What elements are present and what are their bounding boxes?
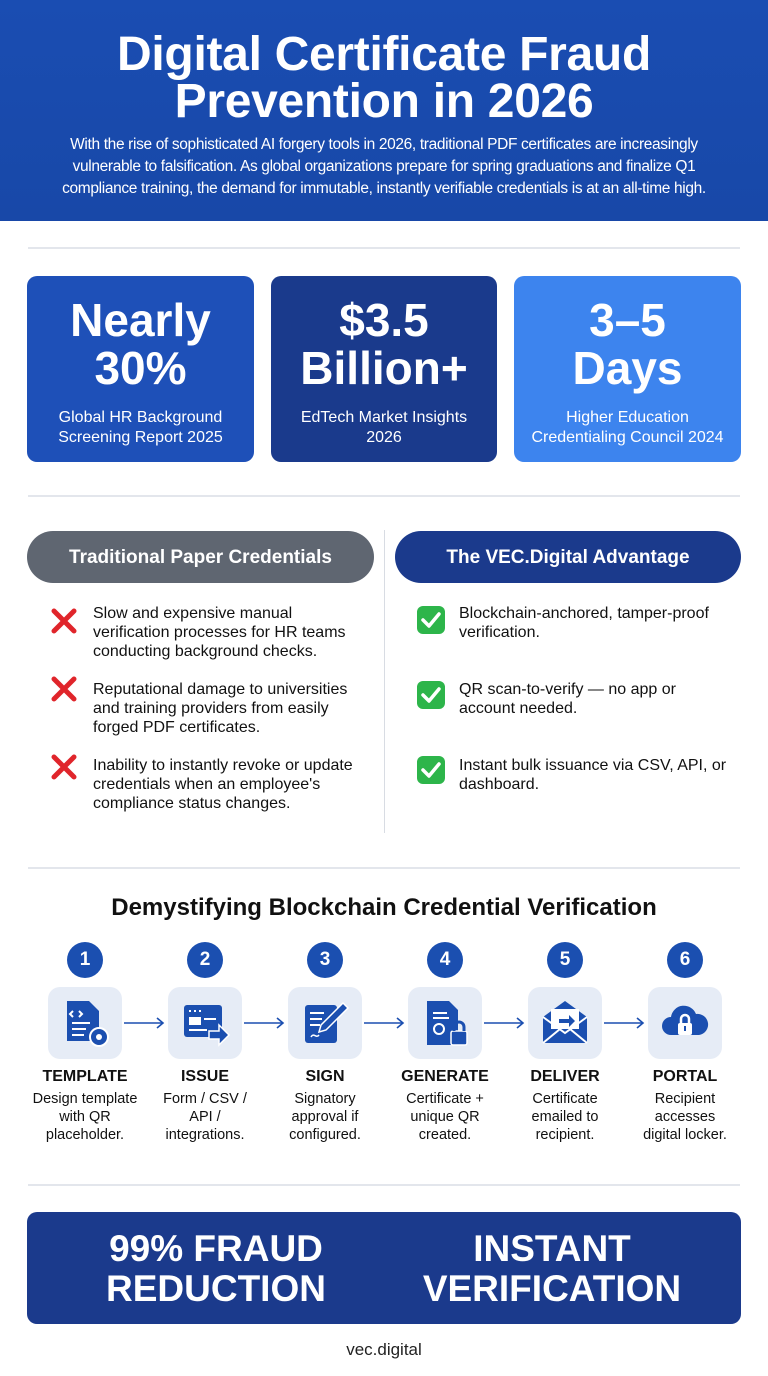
left list: forged PDF certificates. (93, 719, 260, 736)
step 1: TEMPLATE (42, 1068, 128, 1085)
arrow (244, 1017, 284, 1029)
bottom banner (27, 1212, 741, 1324)
step 3: 3 (320, 949, 330, 970)
step 2: API / (189, 1109, 221, 1125)
title (117, 28, 651, 128)
step 4: created. (419, 1127, 471, 1143)
step 4 (401, 942, 489, 1143)
step 5: emailed to (532, 1109, 598, 1125)
step 4: 4 (440, 949, 450, 970)
step 2 (163, 942, 247, 1143)
step 5: DELIVER (530, 1068, 600, 1085)
right list: Blockchain-anchored, tamper-proof (459, 605, 709, 622)
stat card: 30%: Global HR Background (59, 409, 222, 426)
right list (417, 605, 726, 793)
left list (52, 605, 353, 812)
stat card: $3.5B (271, 276, 497, 462)
right list: Instant bulk issuance via CSV, API, or (459, 757, 726, 774)
step 6: PORTAL (653, 1068, 717, 1085)
banner: instant verification (423, 1228, 681, 1309)
left list: conducting background checks. (93, 643, 317, 660)
step 5: Certificate (532, 1091, 598, 1107)
header (0, 0, 768, 221)
step 3: approval if (292, 1109, 358, 1125)
step 1: 1 (80, 949, 90, 970)
step 1: placeholder. (46, 1127, 124, 1143)
footer: vec.digital (346, 1340, 422, 1359)
step 3: configured. (289, 1127, 361, 1143)
subtitle: compliance training, the demand for immutable, instantly verifiable credentials is at an all-time high. (62, 180, 706, 197)
step 6: digital locker. (643, 1127, 727, 1143)
banner: fraud reduction: 99% FRAUD (109, 1228, 323, 1269)
right list: account needed. (459, 700, 577, 717)
subtitle: vulnerable to falsification. As global organizations prepare for spring graduations and finalize Q1 (73, 158, 695, 175)
left list: Slow and expensive manual (93, 605, 292, 622)
stat card: 30%: Nearly (70, 294, 211, 346)
step 2: Form / CSV / (163, 1091, 247, 1107)
stat card: 30%: Screening Report 2025 (58, 429, 223, 446)
step 5: 5 (560, 949, 570, 970)
step 3 (288, 942, 362, 1143)
stat card: 3-5 days (514, 276, 741, 462)
step 4: unique QR (410, 1109, 480, 1125)
check icon (417, 681, 445, 709)
stat card: 3-5 days: Days (573, 342, 682, 394)
stat card: $3.5B: $3.5 (339, 294, 429, 346)
left list: verification processes for HR teams (93, 624, 346, 641)
process heading: Demystifying Blockchain Credential Verification (111, 894, 657, 921)
arrow (604, 1017, 644, 1029)
step 6: 6 (680, 949, 690, 970)
arrow (124, 1017, 164, 1029)
banner: instant verification: INSTANT (473, 1228, 631, 1269)
banner: fraud reduction: REDUCTION (106, 1268, 326, 1309)
step 3: SIGN (305, 1068, 345, 1085)
step 6 (643, 942, 727, 1143)
arrow (484, 1017, 524, 1029)
step 3: Signatory (294, 1091, 356, 1107)
step 2: ISSUE (181, 1068, 229, 1085)
pill: traditional (27, 531, 374, 583)
arrow (364, 1017, 404, 1029)
right list: QR scan-to-verify — no app or (459, 681, 676, 698)
text: compliance status changes. (93, 795, 290, 812)
x icon (52, 608, 76, 634)
step 2: integrations. (166, 1127, 244, 1143)
step 2: 2 (200, 949, 210, 970)
left list: and training providers from easily (93, 700, 329, 717)
pill: VEC advantage (395, 531, 741, 583)
subtitle (62, 136, 706, 197)
left list: credentials when an employee's (93, 776, 320, 793)
check icon (417, 606, 445, 634)
left list: Inability to instantly revoke or update (93, 757, 353, 774)
stat card: 3-5 days: Higher Education (566, 409, 689, 426)
stat card: 3-5 days: 3–5 (589, 294, 666, 346)
step 4: Certificate + (406, 1091, 484, 1107)
step 5: recipient. (536, 1127, 594, 1143)
stat card: $3.5B: 2026 (366, 429, 402, 446)
step 6: Recipient (655, 1091, 715, 1107)
step 1: with QR (59, 1109, 111, 1125)
step 5 (528, 942, 602, 1143)
banner: fraud reduction (106, 1228, 326, 1309)
banner: instant verification: VERIFICATION (423, 1268, 681, 1309)
x icon (52, 676, 76, 702)
right list: verification. (459, 624, 540, 641)
title: Digital Certificate Fraud (117, 28, 651, 81)
step 1: Design template (33, 1091, 137, 1107)
stat card: 3-5 days: Credentialing Council 2024 (531, 429, 724, 446)
x icon (52, 754, 76, 780)
right list: dashboard. (459, 776, 539, 793)
pill: traditional: Traditional Paper Credentials (69, 547, 332, 568)
stat card: $3.5B: Billion+ (300, 342, 468, 394)
step 6: accesses (655, 1109, 715, 1125)
pill: VEC advantage: The VEC.Digital Advantage (446, 547, 690, 568)
subtitle: With the rise of sophisticated AI forgery tools in 2026, traditional PDF certificates are increasingly (70, 136, 698, 153)
stat card: $3.5B: EdTech Market Insights (301, 409, 467, 426)
check icon (417, 756, 445, 784)
stat card: 30%: 30% (94, 342, 187, 394)
step 4: GENERATE (401, 1068, 489, 1085)
stat card: 30% (27, 276, 254, 462)
step 1 (33, 942, 137, 1143)
left list: Reputational damage to universities (93, 681, 347, 698)
title: Prevention in 2026 (175, 75, 593, 128)
